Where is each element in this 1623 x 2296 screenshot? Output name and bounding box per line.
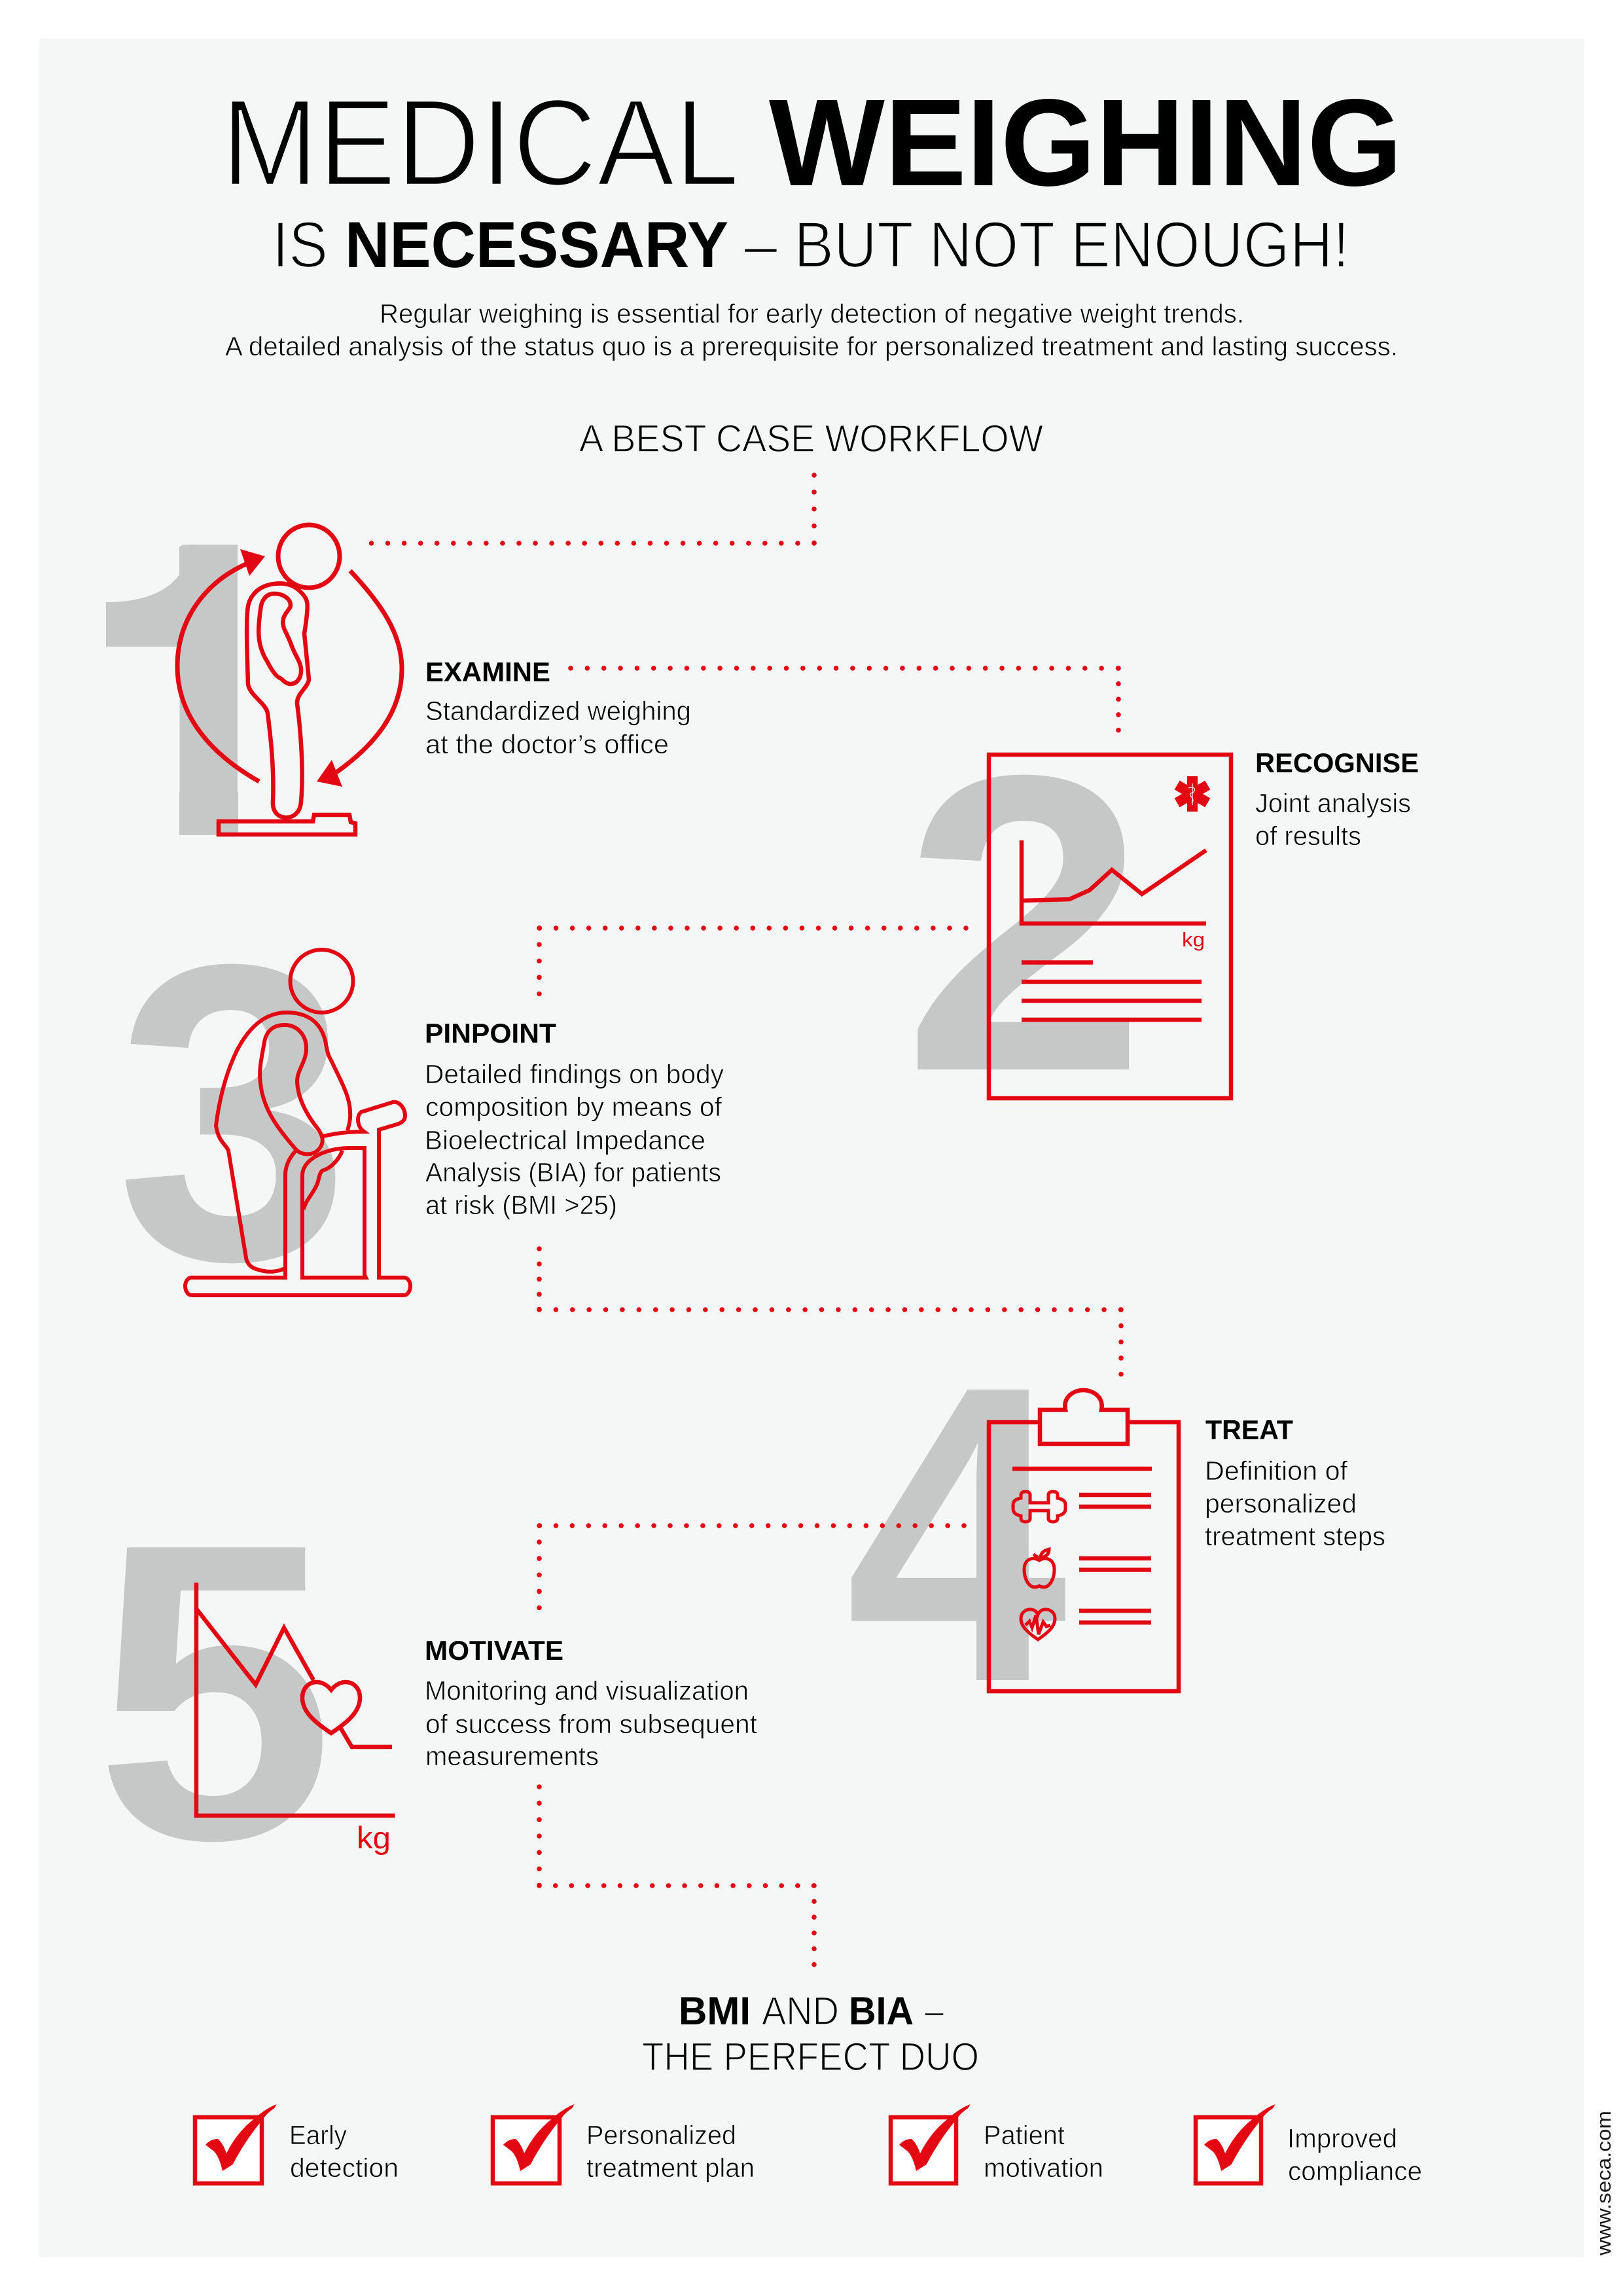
step 1 text: Standardized weighing: [425, 696, 691, 726]
icon: apple: [1024, 1549, 1054, 1587]
step 1 text: [425, 656, 691, 759]
step 5 text: measurements: [425, 1741, 599, 1771]
title: [221, 74, 1402, 212]
title: MEDICAL: [221, 74, 740, 212]
step 3 text: Detailed findings on body: [425, 1059, 724, 1089]
step 1 text: EXAMINE: [425, 656, 550, 687]
connector: step 1 to step 2: [571, 668, 1118, 730]
website url: www.seca.com: [1592, 2111, 1615, 2256]
step 5 text: Monitoring and visualization: [425, 1676, 749, 1706]
intro text: [225, 298, 1398, 361]
summary heading: THE PERFECT DUO: [642, 2035, 979, 2079]
intro text: A detailed analysis of the status quo is a prerequisite for personalized treatment and lasting success.: [225, 331, 1398, 361]
step 5 text: MOTIVATE: [425, 1635, 563, 1666]
step 5 text: [425, 1635, 758, 1771]
icon: weight-loss chart with heart: [196, 1583, 395, 1855]
benefit: early detection: [195, 2104, 399, 2183]
connector: workflow to step 1: [371, 475, 814, 543]
subtitle: NECESSARY: [345, 208, 728, 281]
icon: weight-loss chart with heart: kg: [357, 1820, 391, 1855]
step 2 text: [1255, 747, 1419, 851]
step 2 text: of results: [1255, 821, 1361, 851]
step 3 text: [425, 1018, 724, 1220]
benefit: improved compliance: compliance: [1288, 2156, 1422, 2186]
weight chart: kg: [1182, 928, 1205, 951]
benefit: patient motivation: [891, 2104, 1103, 2183]
connector: step 3 to step 4: [539, 1249, 1121, 1374]
numeral 3: 3: [116, 876, 351, 1348]
workflow heading: A BEST CASE WORKFLOW: [579, 418, 1043, 460]
step 4 text: personalized: [1205, 1488, 1357, 1518]
subtitle: IS: [272, 208, 328, 281]
connector: step 2 to step 3: [539, 928, 966, 994]
benefit: early detection: detection: [290, 2153, 399, 2183]
title: WEIGHING: [769, 74, 1402, 212]
benefit: personalized treatment plan: [493, 2104, 755, 2183]
numeral 4: 4: [846, 1298, 1070, 1770]
subtitle: [272, 208, 1349, 281]
step 2 text: RECOGNISE: [1255, 747, 1419, 778]
intro text: Regular weighing is essential for early detection of negative weight trends.: [380, 298, 1244, 329]
benefit: personalized treatment plan: treatment plan: [586, 2153, 755, 2183]
step 4 text: Definition of: [1205, 1456, 1348, 1486]
step 3 text: Bioelectrical Impedance: [425, 1125, 705, 1155]
icon: person on scale: [177, 525, 402, 834]
step 2 text: Joint analysis: [1255, 788, 1411, 818]
report lines: [1022, 962, 1202, 1020]
benefit: personalized treatment plan: Personalized: [586, 2120, 736, 2150]
icon: dumbbell: [1013, 1492, 1065, 1522]
step 4 text: treatment steps: [1205, 1521, 1385, 1551]
benefit: improved compliance: Improved: [1287, 2123, 1397, 2153]
step 3 text: PINPOINT: [425, 1018, 556, 1049]
weight chart: [1022, 840, 1206, 951]
benefit: early detection: Early: [289, 2120, 347, 2150]
numeral 5: 5: [95, 1456, 334, 1928]
step 4 text: TREAT: [1205, 1414, 1293, 1445]
benefit: improved compliance: [1196, 2104, 1422, 2186]
summary heading: –: [925, 1989, 944, 2033]
summary heading: AND: [762, 1989, 839, 2033]
icon: treatment clipboard: [989, 1390, 1179, 1691]
step 3 text: at risk (BMI >25): [425, 1190, 617, 1220]
list lines: [1012, 1469, 1152, 1623]
summary heading: BMI: [679, 1989, 751, 2033]
step 1 text: at the doctor’s office: [425, 729, 669, 759]
numeral 1: [106, 545, 238, 835]
icon: star of life: [1175, 776, 1210, 812]
benefit: patient motivation: motivation: [984, 2153, 1103, 2183]
summary heading: [642, 1989, 979, 2079]
step 4 text: [1205, 1414, 1385, 1551]
connector: step 5 to summary: [539, 1787, 814, 1965]
benefit: patient motivation: Patient: [984, 2120, 1065, 2150]
numeral 2: 2: [902, 688, 1147, 1159]
step 3 text: Analysis (BIA) for patients: [425, 1157, 721, 1187]
connector: step 4 to step 5: [539, 1526, 964, 1608]
icon: person on BIA device: [185, 950, 410, 1295]
icon: heart with pulse: [1021, 1609, 1055, 1640]
step 5 text: of success from subsequent: [425, 1709, 758, 1739]
summary heading: BIA: [849, 1989, 914, 2033]
subtitle: – BUT NOT ENOUGH!: [744, 208, 1349, 281]
icon: medical report: [989, 755, 1231, 1098]
numeral 1: 1: [81, 453, 316, 925]
step 3 text: composition by means of: [425, 1092, 722, 1122]
